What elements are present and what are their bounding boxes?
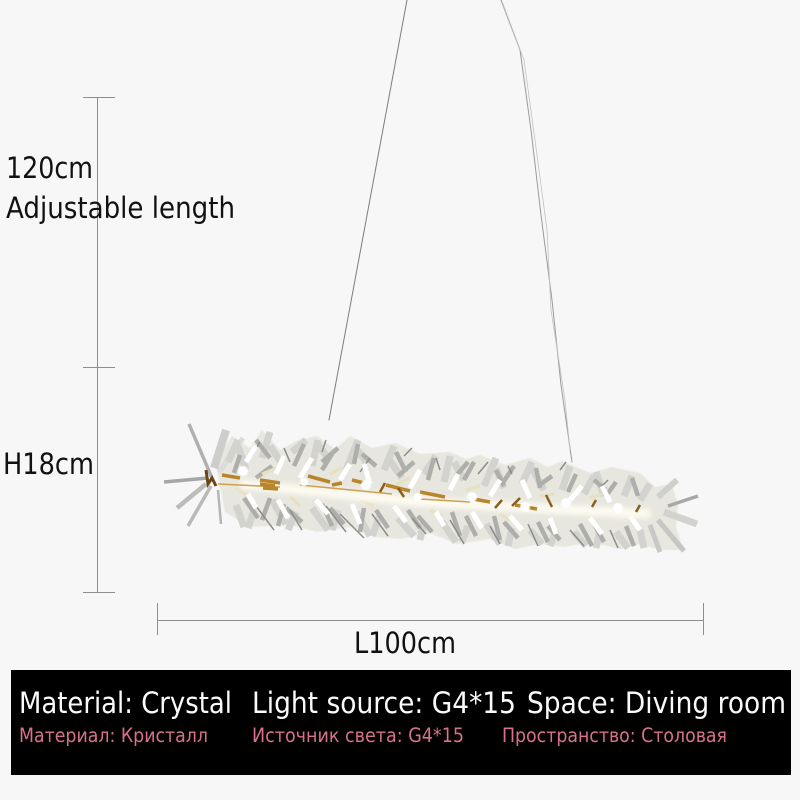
warm reflections [236, 468, 602, 520]
dark crystal edges [252, 440, 618, 548]
Russian specifications: Материал: Кристалл [19, 724, 208, 747]
mid grey shards [234, 440, 638, 546]
crystal body silhouette [215, 430, 684, 550]
dimension label: length: L100cm [354, 626, 456, 660]
pale facet shards [228, 432, 650, 548]
left end crystal spikes [164, 424, 243, 526]
length dimension line [157, 603, 704, 635]
dimension label: cable length [6, 151, 235, 225]
white crystal highlights [246, 446, 640, 534]
dimension label: cable length: 120cm [6, 151, 93, 185]
Russian specifications [19, 724, 727, 747]
Russian specifications: Источник света: G4*15 [252, 724, 464, 747]
right end crystal spikes [650, 480, 698, 552]
dimension label: cable length: Adjustable length [6, 191, 235, 225]
chandelier [164, 424, 698, 552]
height dimension lines [83, 97, 115, 592]
gold central rod [206, 470, 640, 512]
suspension wires [329, 0, 572, 462]
lit bulbs [238, 466, 623, 513]
specification panel [11, 670, 791, 775]
central glow [240, 484, 650, 514]
English specifications [19, 686, 786, 720]
English specifications: Light source: G4*15 [252, 686, 516, 720]
Russian specifications: Пространство: Столовая [502, 724, 727, 747]
English specifications: Material: Crystal [19, 686, 232, 720]
dimension label: height: H18cm [3, 447, 94, 481]
